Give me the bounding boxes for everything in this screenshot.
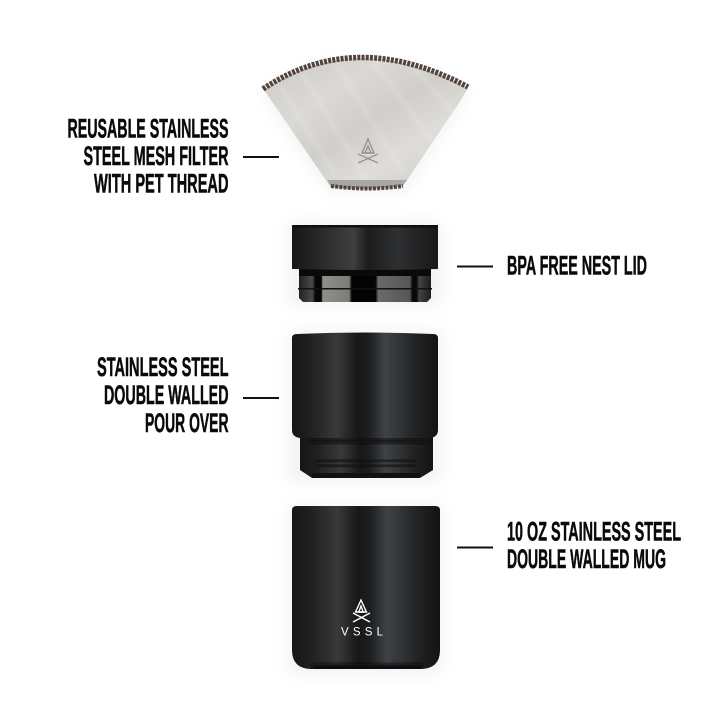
- pour over body: [292, 332, 438, 438]
- filter bottom stitching: [331, 186, 403, 188]
- filter mesh streaks: [280, 60, 470, 185]
- mug base shade: [312, 664, 422, 672]
- icon: mug: [292, 506, 440, 672]
- label: filter: [68, 114, 228, 198]
- label: filter: STEEL MESH FILTER: [84, 141, 228, 171]
- icon: pour over: [292, 332, 438, 478]
- filter logo: [358, 139, 378, 163]
- label: pour over: [97, 352, 228, 438]
- label: filter: WITH PET THREAD: [94, 168, 228, 198]
- icon: nest lid: [292, 225, 438, 302]
- leader line: mug: [457, 546, 493, 548]
- pour over neck: [300, 434, 433, 478]
- label: mug: [507, 516, 681, 574]
- label: pour over: STAINLESS STEEL: [97, 352, 228, 382]
- label: filter: REUSABLE STAINLESS: [68, 114, 228, 144]
- mug brand text: VSSL: [341, 626, 384, 638]
- soft shadows: [262, 62, 468, 674]
- label: pour over: POUR OVER: [145, 408, 228, 438]
- mug logo: [353, 600, 370, 622]
- mug body: [292, 506, 440, 669]
- filter mesh body: [264, 58, 468, 188]
- icon: stainless steel mesh filter: [263, 57, 470, 189]
- leader line: pour over: [243, 397, 279, 399]
- leader line: filter: [243, 156, 279, 158]
- lid threads: [299, 268, 431, 302]
- leader line: lid: [457, 266, 493, 268]
- lid body: [292, 225, 438, 270]
- label: pour over: DOUBLE WALLED: [104, 380, 228, 410]
- filter top stitching: [263, 57, 468, 89]
- filter lower fold: [327, 180, 407, 189]
